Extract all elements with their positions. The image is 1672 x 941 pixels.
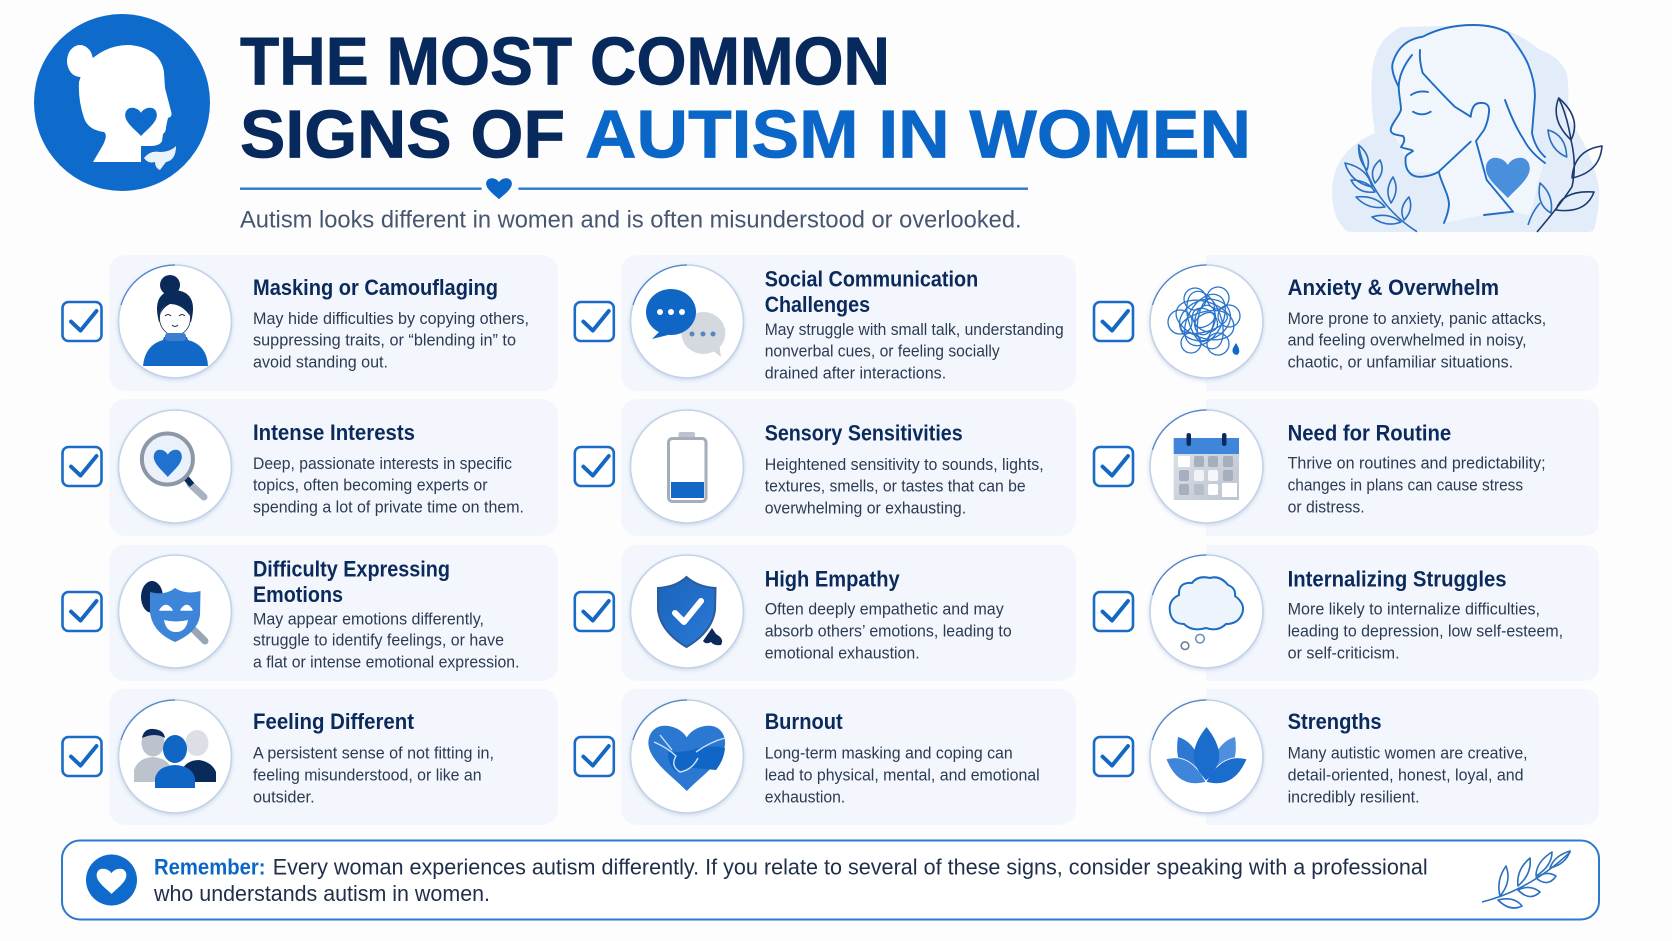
- description: detail-oriented, honest, loyal, and: [1288, 766, 1524, 784]
- description: avoid standing out.: [253, 354, 388, 372]
- description: a flat or intense emotional expression.: [253, 654, 520, 672]
- divider with heart: [240, 178, 1028, 199]
- description: May appear emotions differently,: [253, 610, 484, 628]
- description: struggle to identify feelings, or have: [253, 632, 504, 650]
- description: Often deeply empathetic and may: [765, 601, 1004, 619]
- description: [765, 321, 1064, 382]
- description: A persistent sense of not fitting in,: [253, 745, 494, 763]
- description: More prone to anxiety, panic attacks,: [1288, 310, 1546, 328]
- logo: woman silhouette in blue circle: [34, 14, 210, 191]
- icon: magnifier with heart: [118, 410, 232, 523]
- heading: [765, 267, 978, 317]
- description: lead to physical, mental, and emotional: [765, 766, 1040, 784]
- heading: Need for Routine: [1288, 420, 1451, 445]
- heading: Challenges: [765, 292, 870, 317]
- icon: leaf sprig: [1482, 851, 1571, 908]
- checkbox: [1094, 447, 1133, 486]
- panel: Sensory Sensitivities: [575, 399, 1076, 536]
- title: AUTISM IN WOMEN: [585, 97, 1251, 173]
- description: [1288, 310, 1546, 372]
- description: Thrive on routines and predictability;: [1288, 455, 1546, 473]
- checkbox: [62, 302, 102, 341]
- panel: Need for Routine: [1094, 399, 1599, 536]
- description: [765, 456, 1044, 518]
- checkbox: [575, 592, 614, 631]
- callout text: Every woman experiences autism differently. If you relate to several of these signs, consider speaking with a professional: [273, 854, 1428, 879]
- description: textures, smells, or tastes that can be: [765, 478, 1026, 496]
- checkbox: [575, 737, 614, 776]
- heading: Masking or Camouflaging: [253, 275, 498, 300]
- description: absorb others’ emotions, leading to: [765, 622, 1012, 640]
- panel: Difficulty Expressing Emotions: [62, 545, 558, 681]
- heading: Social Communication: [765, 267, 978, 292]
- icon: woman with hair bun: [118, 265, 232, 378]
- panel: Social Communication Challenges: [575, 255, 1076, 391]
- panel: Masking or Camouflaging: [62, 255, 558, 391]
- description: [765, 745, 1040, 806]
- description: [253, 455, 524, 517]
- icon: theatre mask: [118, 555, 232, 668]
- description: overwhelming or exhausting.: [765, 500, 966, 518]
- description: chaotic, or unfamiliar situations.: [1288, 354, 1513, 372]
- description: [253, 310, 529, 372]
- heading: Anxiety & Overwhelm: [1288, 275, 1499, 300]
- description: incredibly resilient.: [1288, 788, 1420, 806]
- icon: shield with check: [630, 555, 744, 668]
- checkbox: [1094, 737, 1133, 776]
- description: [1288, 455, 1546, 517]
- description: and feeling overwhelmed in noisy,: [1288, 332, 1527, 350]
- subtitle: Autism looks different in women and is often misunderstood or overlooked.: [240, 207, 1022, 234]
- panel: Strengths: [1094, 689, 1599, 825]
- icon: chat bubbles: [630, 265, 744, 378]
- checkbox: [1094, 302, 1133, 341]
- description: drained after interactions.: [765, 364, 946, 382]
- panel: Intense Interests: [62, 399, 558, 536]
- description: topics, often becoming experts or: [253, 477, 488, 495]
- icon: group of people: [118, 700, 232, 813]
- description: May struggle with small talk, understanding: [765, 321, 1064, 339]
- heading: Burnout: [765, 709, 843, 734]
- description: More likely to internalize difficulties,: [1288, 601, 1540, 619]
- description: Many autistic women are creative,: [1288, 745, 1528, 763]
- panel: Burnout: [575, 689, 1076, 825]
- description: nonverbal cues, or feeling socially: [765, 343, 1000, 361]
- checkbox: [575, 447, 614, 486]
- description: Heightened sensitivity to sounds, lights,: [765, 456, 1044, 474]
- panel: Feeling Different: [62, 689, 558, 825]
- description: feeling misunderstood, or like an: [253, 766, 482, 784]
- icon: thought cloud: [1150, 555, 1263, 668]
- callout text: who understands autism in women.: [153, 881, 490, 906]
- heading: Intense Interests: [253, 420, 415, 445]
- heading: Emotions: [253, 582, 343, 607]
- description: spending a lot of private time on them.: [253, 499, 524, 517]
- checkbox: [62, 592, 102, 631]
- checkbox: [1094, 592, 1133, 631]
- icon: calendar: [1150, 410, 1263, 523]
- icon: heart badge: [86, 854, 137, 906]
- heading: Difficulty Expressing: [253, 557, 450, 582]
- heading: [253, 557, 450, 607]
- icon: heart with hands: [630, 700, 744, 813]
- heading: High Empathy: [765, 567, 900, 592]
- description: changes in plans can cause stress: [1288, 477, 1523, 495]
- checkbox: [575, 302, 614, 341]
- description: suppressing traits, or “blending in” to: [253, 332, 516, 350]
- callout text: [153, 854, 1428, 906]
- description: [253, 745, 494, 806]
- description: [1288, 745, 1528, 806]
- panel: Anxiety & Overwhelm: [1094, 255, 1599, 391]
- title: [240, 23, 1251, 173]
- description: outsider.: [253, 788, 315, 806]
- description: Deep, passionate interests in specific: [253, 455, 512, 473]
- title: THE MOST COMMON: [240, 23, 890, 99]
- callout text: Remember:: [154, 854, 266, 879]
- heading: Sensory Sensitivities: [765, 420, 963, 445]
- icon: tangled scribble: [1150, 265, 1263, 378]
- icon: lotus flower: [1150, 700, 1263, 813]
- callout: Remember: [62, 840, 1599, 920]
- description: or distress.: [1288, 499, 1365, 517]
- description: leading to depression, low self-esteem,: [1288, 622, 1563, 640]
- heading: Feeling Different: [253, 709, 415, 734]
- checkbox: [62, 737, 102, 776]
- description: exhaustion.: [765, 788, 845, 806]
- description: [765, 601, 1012, 662]
- panel: High Empathy: [575, 545, 1076, 681]
- description: May hide difficulties by copying others,: [253, 310, 529, 328]
- description: or self-criticism.: [1288, 644, 1400, 662]
- checkbox: [62, 447, 102, 486]
- icon: low battery: [630, 410, 744, 523]
- panel: Internalizing Struggles: [1094, 545, 1599, 681]
- illustration: woman profile with heart and leaves: [1332, 25, 1602, 232]
- description: [1288, 601, 1563, 662]
- description: [253, 610, 520, 672]
- description: Long-term masking and coping can: [765, 745, 1013, 763]
- title: SIGNS OF: [240, 97, 565, 173]
- heading: Internalizing Struggles: [1288, 567, 1507, 592]
- heading: Strengths: [1288, 709, 1382, 734]
- description: emotional exhaustion.: [765, 644, 920, 662]
